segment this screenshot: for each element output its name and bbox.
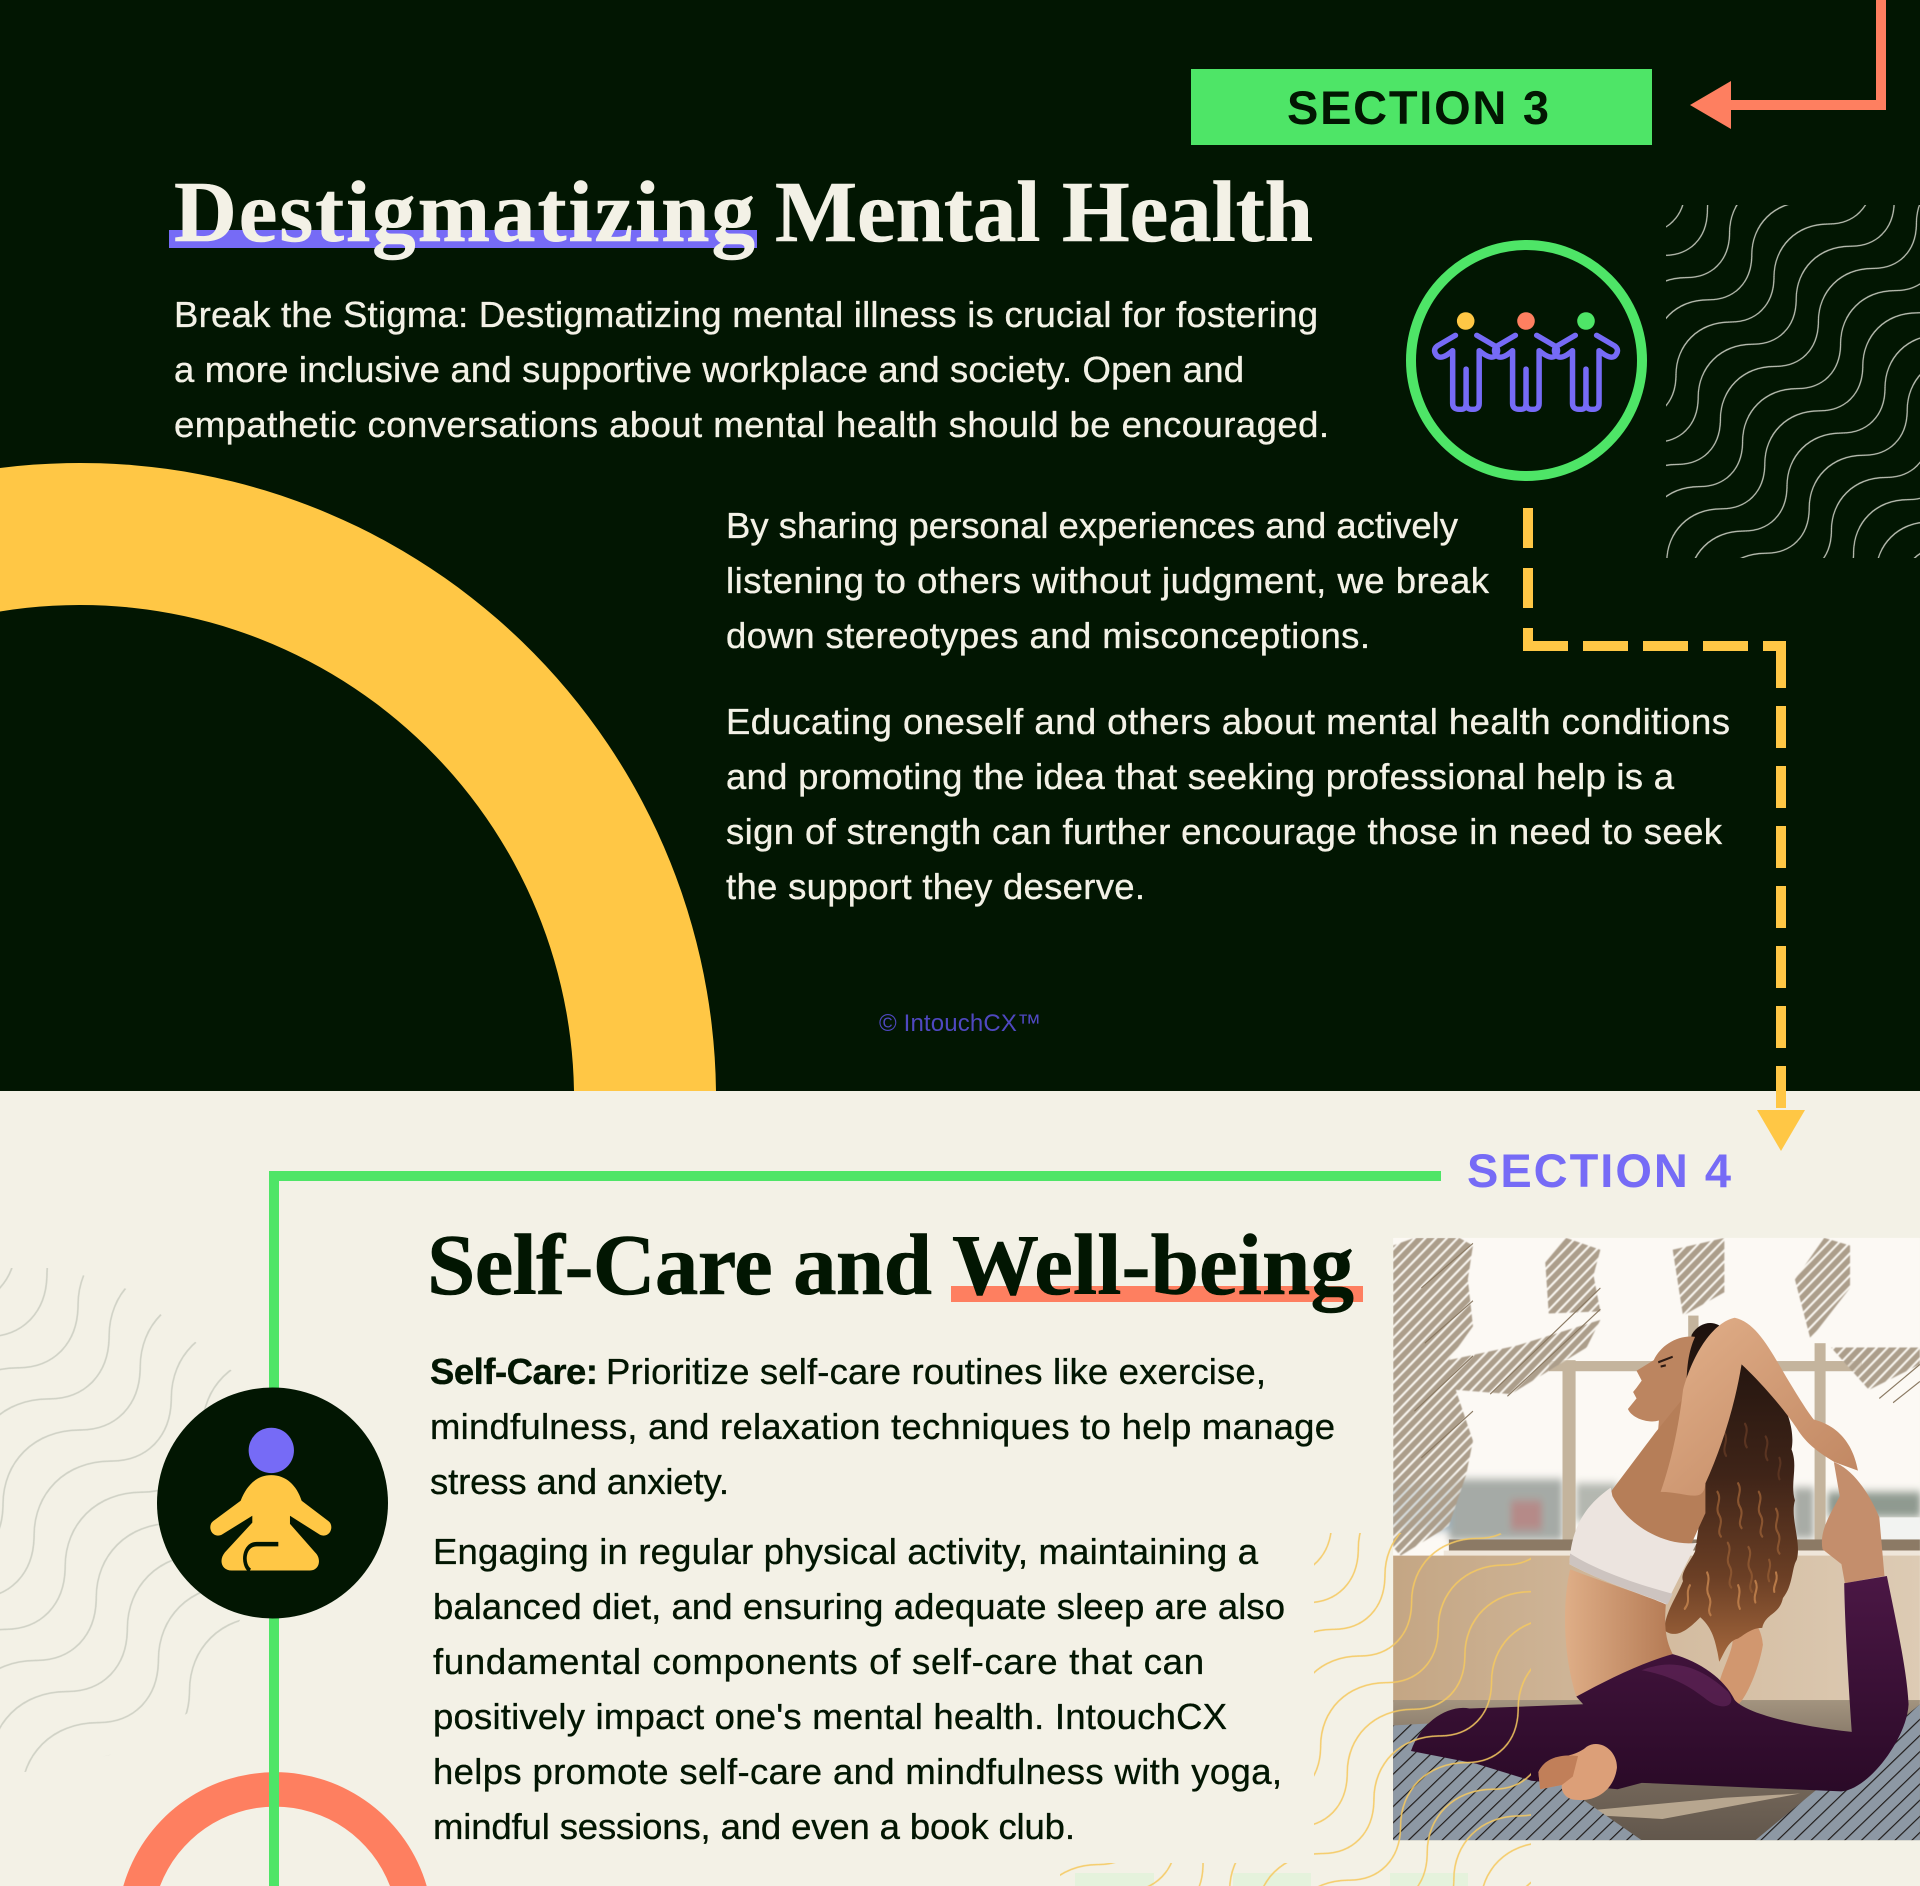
yellow arc <box>0 463 716 1091</box>
torso <box>1565 1569 1673 1697</box>
text block: self-care: mindfulness, and relaxation techniques to help manage <box>430 1406 1335 1447</box>
text block: sharing experiences: listening to others without judgment, we break <box>726 560 1490 601</box>
section 3 badge <box>1191 69 1652 145</box>
coral arc <box>123 1772 427 1886</box>
dashed arrow: yellow to section 4 <box>1523 508 1805 1151</box>
text block: break the stigma: empathetic conversations about mental health should be encouraged. <box>174 404 1329 445</box>
text block: self-care: stress and anxiety. <box>430 1461 729 1502</box>
text block: break the stigma <box>174 294 1329 445</box>
icon: meditation figure in dark circle <box>157 1388 388 1618</box>
title: Self-Care and Well-being <box>427 1216 1363 1313</box>
text block: educating: Educating oneself and others about mental health conditions <box>726 701 1730 742</box>
title: Self-Care and Well-being: Self-Care and <box>427 1216 932 1313</box>
text block: physical activity: fundamental components of self-care that can <box>433 1641 1204 1682</box>
icon: three people in green circle <box>1411 245 1642 476</box>
text block: physical activity: mindful sessions, and even a book club. <box>433 1806 1075 1847</box>
raised arm <box>1661 1318 1858 1496</box>
foot on floor <box>1538 1744 1617 1800</box>
section 4 label: SECTION 4 <box>1467 1144 1731 1197</box>
text block: self-care: Self-Care: <box>430 1351 598 1392</box>
text block: educating <box>726 701 1730 907</box>
head <box>1628 1336 1695 1430</box>
text block: physical activity: balanced diet, and ensuring adequate sleep are also <box>433 1586 1285 1627</box>
text block: physical activity: Engaging in regular physical activity, maintaining a <box>433 1531 1259 1572</box>
neck and chest <box>1611 1398 1705 1547</box>
hair <box>1664 1323 1798 1662</box>
text block: sharing experiences <box>726 505 1490 656</box>
text block: sharing experiences: down stereotypes and misconceptions. <box>726 615 1370 656</box>
text block: educating: the support they deserve. <box>726 866 1145 907</box>
text block: physical activity: helps promote self-care and mindfulness with yoga, <box>433 1751 1282 1792</box>
text block: self-care <box>430 1351 1335 1502</box>
green frame line <box>274 1176 1441 1886</box>
text block: sharing experiences: By sharing personal experiences and actively <box>726 505 1459 546</box>
text block: self-care: Prioritize self-care routines like exercise, <box>606 1351 1266 1392</box>
panel: section 4 light background <box>0 1091 1920 1886</box>
wave pattern: yellow lower <box>1060 1863 1314 1886</box>
text block: physical activity: positively impact one's mental health. IntouchCX <box>433 1696 1227 1737</box>
photo: woman in yoga pose <box>1393 1238 1920 1840</box>
wave pattern: top right <box>1666 205 1920 558</box>
title: Self-Care and Well-being: Well-being <box>952 1216 1354 1313</box>
title: Destigmatizing Mental Health: Mental Health <box>775 163 1313 260</box>
text block: break the stigma: a more inclusive and supportive workplace and society. Open and <box>174 349 1244 390</box>
text block: break the stigma: Break the Stigma: Destigmatizing mental illness is crucial for fostering <box>174 294 1318 335</box>
wave pattern: yellow over photo <box>1314 1533 1531 1886</box>
sports top <box>1569 1488 1697 1604</box>
panel: section 3 dark background <box>0 0 1920 1091</box>
back arm <box>1720 1628 1763 1704</box>
title: Destigmatizing Mental Health <box>169 163 1313 260</box>
section 3 badge: SECTION 3 <box>1287 81 1549 134</box>
text block: educating: sign of strength can further encourage those in need to seek <box>726 811 1723 852</box>
text block: educating: and promoting the idea that seeking professional help is a <box>726 756 1675 797</box>
hatch brush strokes <box>1393 1238 1920 1556</box>
wave pattern: left <box>0 1268 300 1772</box>
leggings <box>1411 1576 1909 1791</box>
title: Destigmatizing Mental Health: Destigmatizing <box>174 163 755 260</box>
arrow: coral pointing to section 3 <box>1690 0 1881 129</box>
raised foot <box>1822 1462 1884 1583</box>
copyright: © IntouchCX™ <box>879 1010 1041 1037</box>
text block: physical activity <box>433 1531 1285 1847</box>
faint green boxes <box>1075 1873 1468 1886</box>
